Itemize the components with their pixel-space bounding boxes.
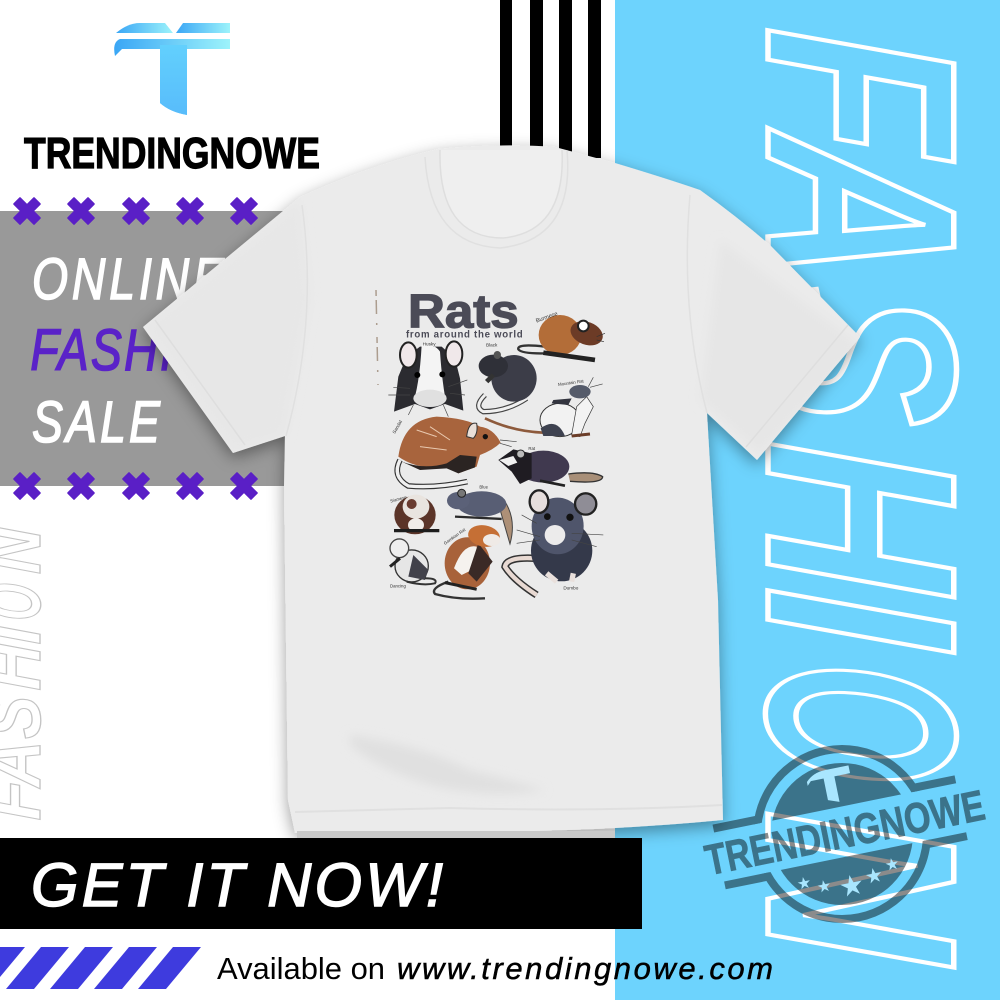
big outlined word FASHION [710, 25, 1000, 970]
rat: siamese [390, 494, 439, 534]
stamp stars: ★ [883, 853, 901, 875]
rat: burmese: Burmese [535, 311, 559, 325]
rat: orange white standing [434, 523, 502, 599]
call to action bar [0, 838, 642, 929]
sale heading: ONLINE [32, 247, 225, 312]
call to action text: GET IT NOW! [31, 851, 443, 919]
stamp stars [795, 853, 905, 912]
t-shirt [143, 145, 860, 833]
availability line: Available on [217, 951, 385, 986]
rats print on the shirt [388, 285, 606, 599]
rat: burmese [518, 311, 606, 360]
stamp badge [702, 745, 986, 923]
shirt shadow strip above bar [297, 831, 615, 838]
rat: dancing white [390, 539, 436, 588]
shirt folds and seams [143, 150, 860, 812]
logo: T mark [114, 23, 230, 115]
rat: mountain rat: Mountain Rat [558, 378, 585, 387]
panel: blue background [615, 0, 1000, 1000]
rat: orange white standing: Gambian Rat [443, 527, 467, 546]
shirt body [143, 145, 860, 833]
rat: dumbo: Dumbo [563, 585, 579, 590]
stamp stars: ★ [795, 872, 813, 894]
rat: blue [447, 484, 512, 544]
rat: black [479, 343, 537, 412]
rat: purple black [498, 446, 603, 486]
logo right wing [176, 23, 230, 33]
panel: grey sale block [0, 211, 286, 486]
rat: mountain rat [485, 377, 603, 437]
blue slanted stripes [0, 947, 201, 989]
stamp stars: ★ [863, 862, 885, 889]
stamp stars: ★ [815, 875, 833, 897]
availability line: www.trendingnowe.com [397, 951, 773, 986]
stamp stars: ★ [836, 867, 867, 904]
availability line [217, 951, 773, 986]
logo stem and bar [114, 39, 230, 115]
rat: siamese: Siamese [390, 494, 408, 504]
print subtitle: from around the world [406, 329, 523, 340]
sale heading [30, 247, 247, 455]
rat: blue: Blue [479, 484, 489, 489]
rat: black: Black [486, 343, 498, 348]
rat: purple black: Rat [528, 446, 536, 451]
sale heading: SALE [32, 390, 161, 455]
stamp T mark [805, 765, 855, 807]
black vertical stripes [500, 0, 601, 158]
rat: dumbo [505, 490, 603, 595]
rat: big brown: Sandal [392, 419, 403, 434]
logo wordmark: TRENDINGNOWE [24, 129, 320, 178]
logo left wing [116, 23, 173, 33]
stamp ring, disc and band [702, 745, 986, 923]
small outlined word FASHION [0, 524, 58, 821]
rat: husky portrait: Husky [423, 341, 436, 346]
print title: Rats [408, 285, 519, 338]
rat: dancing white: Dancing [390, 583, 406, 588]
bottom row of purple crosses [14, 473, 257, 499]
sale heading: FASHION [30, 318, 247, 383]
top row of purple crosses [14, 198, 257, 224]
rat: big brown [392, 417, 517, 487]
rat: husky portrait [388, 341, 467, 417]
